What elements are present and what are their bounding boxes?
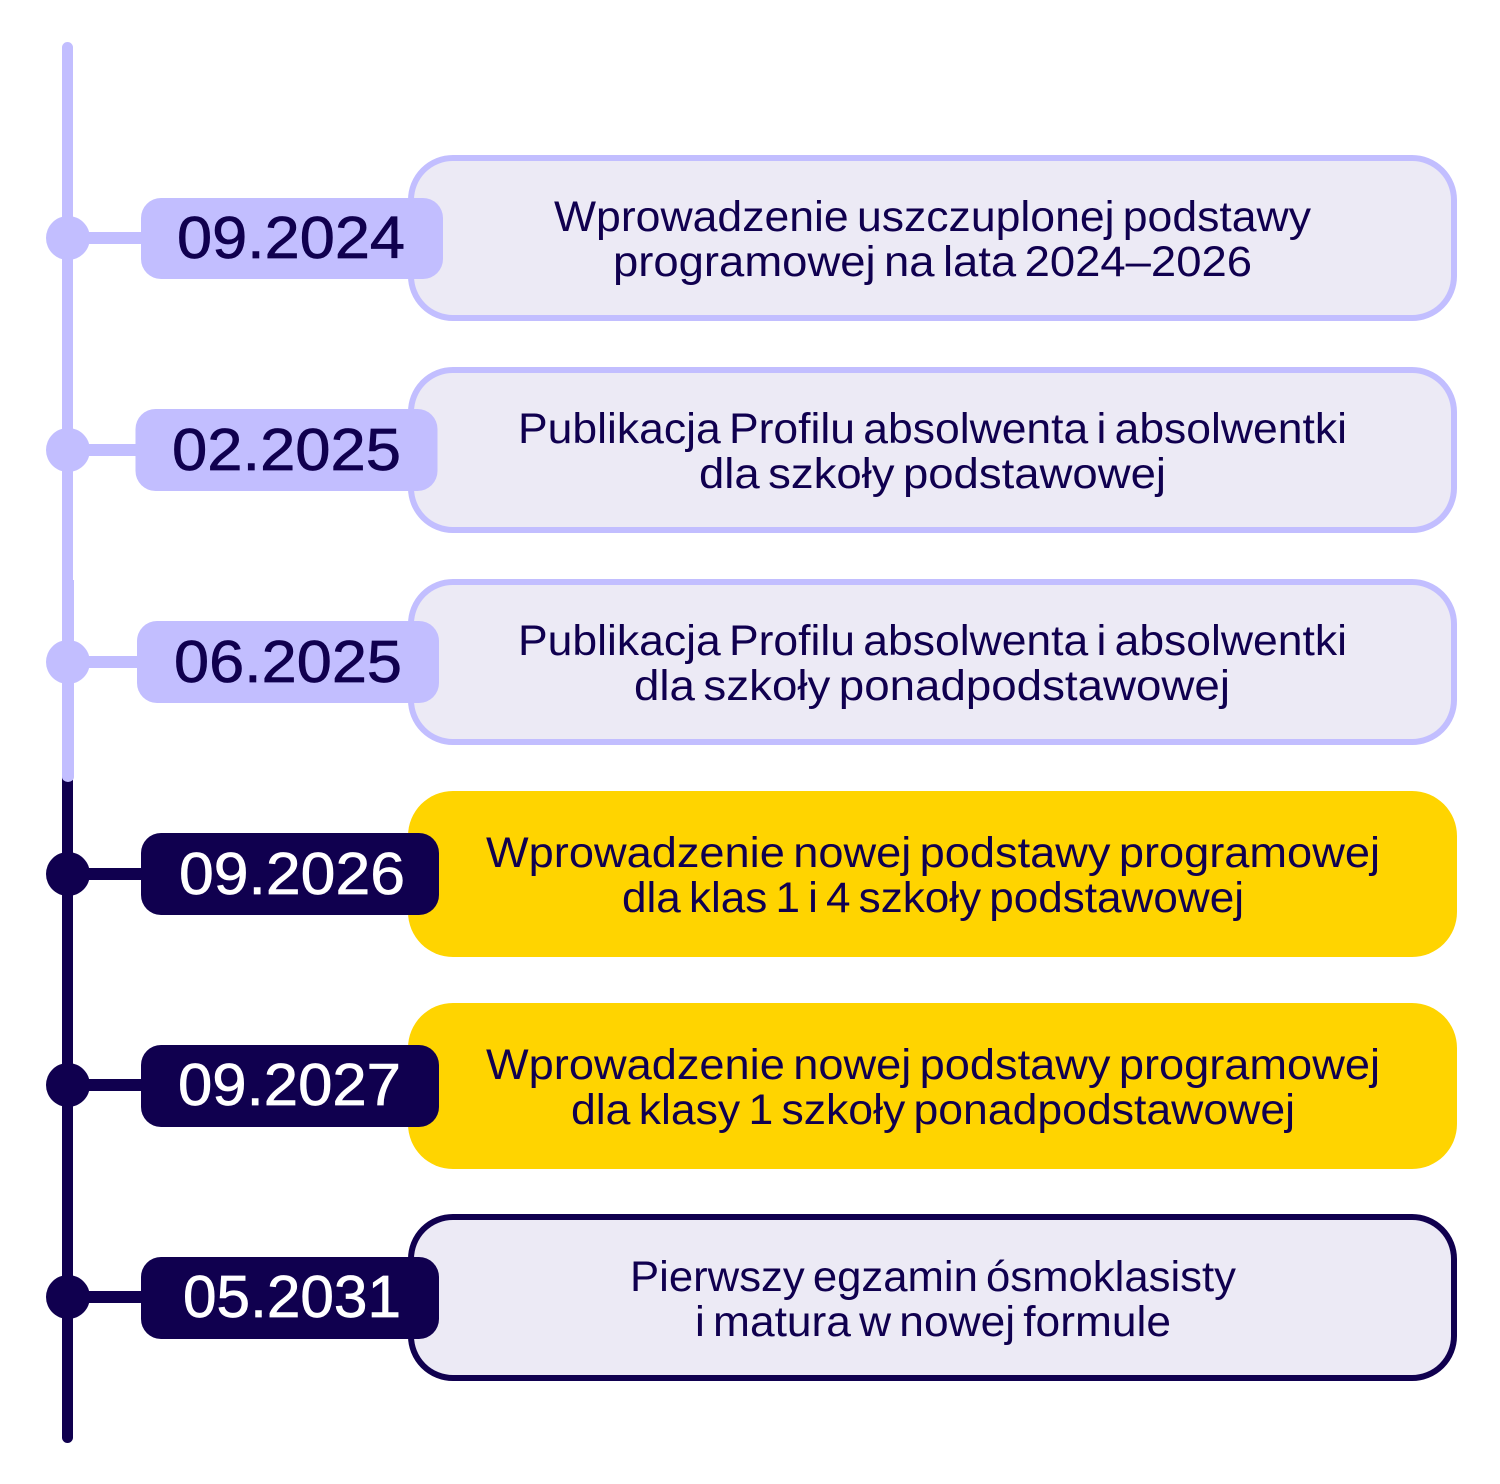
milestone: 09.2024: [46, 158, 1454, 318]
card: 09.2026: [408, 791, 1457, 957]
card: 05.2031: Pierwszy egzamin ósmoklasisty: [630, 1253, 1237, 1301]
date badge: 05.2031: [141, 1257, 439, 1339]
card: 06.2025: Publikacja Profilu absolwenta i absolwentki: [518, 617, 1347, 665]
card: 09.2027: dla klasy 1 szkoły ponadpodstawowej: [571, 1086, 1295, 1134]
axis: past segment: [62, 42, 74, 782]
milestone: 09.2027: [46, 1003, 1457, 1169]
date badge: 09.2027: [141, 1045, 439, 1127]
date badge: 09.2027: 09.2027: [178, 1052, 401, 1118]
date badge: 05.2031: 05.2031: [183, 1264, 401, 1330]
date badge: 02.2025: 02.2025: [172, 417, 401, 483]
card: 02.2025: [411, 370, 1454, 530]
card: 09.2027: Wprowadzenie nowej podstawy programowej: [486, 1041, 1380, 1089]
card: 09.2024: programowej na lata 2024–2026: [613, 238, 1252, 286]
milestone: 09.2026: [46, 791, 1457, 957]
card: 09.2024: Wprowadzenie uszczuplonej podstawy: [554, 193, 1312, 241]
card: 02.2025: Publikacja Profilu absolwenta i absolwentki: [518, 405, 1347, 453]
marker: 06.2025: [46, 640, 143, 684]
marker: 09.2027: [46, 1063, 148, 1107]
date badge: 06.2025: [137, 621, 439, 703]
card: 02.2025: dla szkoły podstawowej: [699, 450, 1166, 498]
card: 06.2025: [411, 582, 1454, 742]
date badge: 02.2025: [136, 409, 438, 491]
card: 09.2024: [411, 158, 1454, 318]
date badge: 09.2024: [141, 198, 443, 279]
axis: future segment: [62, 700, 73, 1443]
date badge: 06.2025: 06.2025: [174, 629, 402, 695]
milestone: 05.2031: [46, 1217, 1454, 1378]
date badge: 09.2026: 09.2026: [179, 841, 405, 907]
card: 09.2026: Wprowadzenie nowej podstawy programowej: [486, 829, 1380, 877]
marker: 02.2025: [46, 428, 143, 472]
card: 09.2027: [408, 1003, 1457, 1169]
marker: 09.2024: [46, 216, 148, 260]
milestone: 06.2025: [46, 582, 1454, 742]
card: 06.2025: dla szkoły ponadpodstawowej: [634, 662, 1230, 710]
marker: 05.2031: [46, 1275, 148, 1319]
date badge: 09.2026: [141, 833, 439, 915]
card: 09.2026: dla klas 1 i 4 szkoły podstawowej: [622, 874, 1244, 922]
card: 05.2031: i matura w nowej formule: [695, 1298, 1171, 1346]
date badge: 09.2024: 09.2024: [177, 205, 405, 271]
card: 05.2031: [411, 1217, 1454, 1378]
marker: 09.2026: [46, 852, 148, 896]
milestone: 02.2025: [46, 370, 1454, 530]
